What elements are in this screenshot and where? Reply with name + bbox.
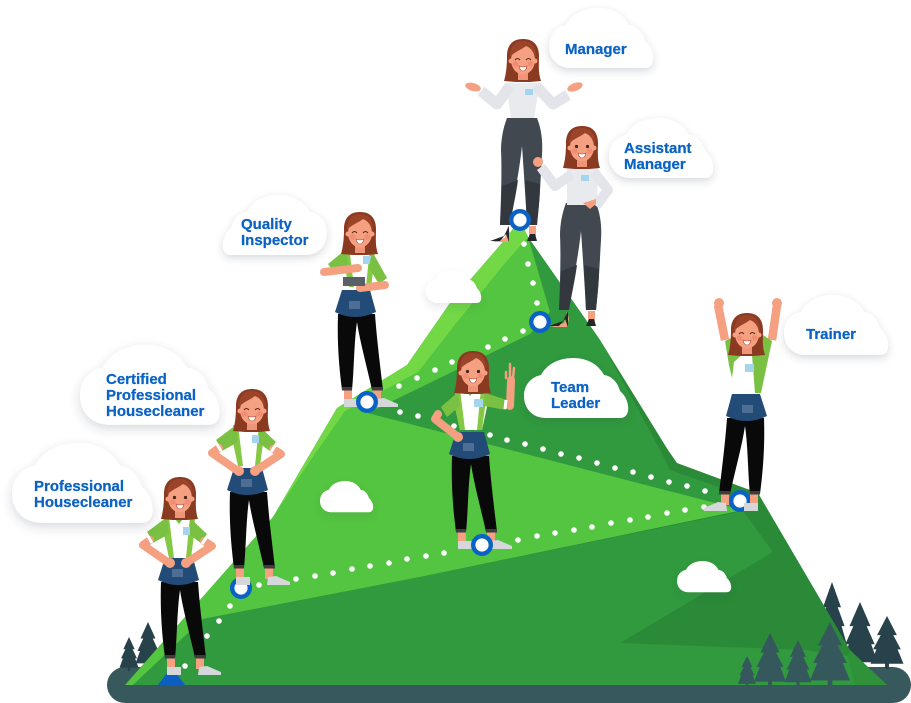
marker ring: assistant manager bbox=[531, 313, 549, 331]
marker ring: trainer under shoes bbox=[731, 492, 749, 510]
character: certified professional housecleaner bbox=[212, 389, 290, 585]
ground base bbox=[107, 667, 911, 703]
cloud label: assistant manager: Assistant bbox=[624, 140, 692, 157]
front trees bbox=[738, 622, 850, 687]
cloud label: team leader: Team bbox=[551, 379, 589, 396]
marker ring: certified start under shoes bbox=[232, 579, 250, 597]
cloud label: trainer: Trainer bbox=[806, 326, 856, 343]
cloud label: assistant manager: Manager bbox=[624, 156, 686, 173]
cloud label: team leader: Leader bbox=[551, 395, 600, 412]
mountain bbox=[125, 220, 887, 685]
marker ring: quality inspector bbox=[358, 393, 376, 411]
marker ring: team leader bbox=[473, 536, 491, 554]
cloud label: manager: Manager bbox=[565, 41, 627, 58]
cloud label: certified professional housecleaner: Professional bbox=[106, 387, 196, 404]
cloud label: quality inspector: Quality bbox=[241, 216, 293, 233]
small mountain clouds bbox=[320, 270, 731, 592]
cloud label: professional housecleaner: Housecleaner bbox=[34, 494, 133, 511]
cloud label: team leader bbox=[524, 358, 628, 418]
cloud label: certified professional housecleaner: Housecleaner bbox=[106, 403, 205, 420]
character: manager bbox=[464, 39, 584, 242]
cloud label: certified professional housecleaner bbox=[80, 345, 220, 425]
dotted career paths bbox=[182, 241, 708, 669]
back trees left bbox=[120, 622, 172, 671]
character: professional housecleaner bbox=[143, 477, 221, 675]
character: quality inspector bbox=[324, 212, 398, 407]
cloud label: professional housecleaner bbox=[12, 443, 153, 523]
cloud label: quality inspector: Inspector bbox=[241, 232, 309, 249]
character: assistant manager bbox=[533, 126, 608, 327]
cloud label: trainer bbox=[784, 295, 888, 355]
character: trainer bbox=[704, 298, 782, 511]
character: team leader bbox=[435, 351, 514, 549]
blue start marker bbox=[158, 673, 185, 685]
back trees right bbox=[817, 582, 904, 669]
cloud label: professional housecleaner: Professional bbox=[34, 478, 124, 495]
marker ring: manager bbox=[511, 211, 529, 229]
cloud label: assistant manager bbox=[609, 118, 713, 178]
cloud label: manager bbox=[549, 8, 653, 68]
cloud label: quality inspector bbox=[223, 195, 327, 255]
cloud label: certified professional housecleaner: Certified bbox=[106, 371, 167, 388]
